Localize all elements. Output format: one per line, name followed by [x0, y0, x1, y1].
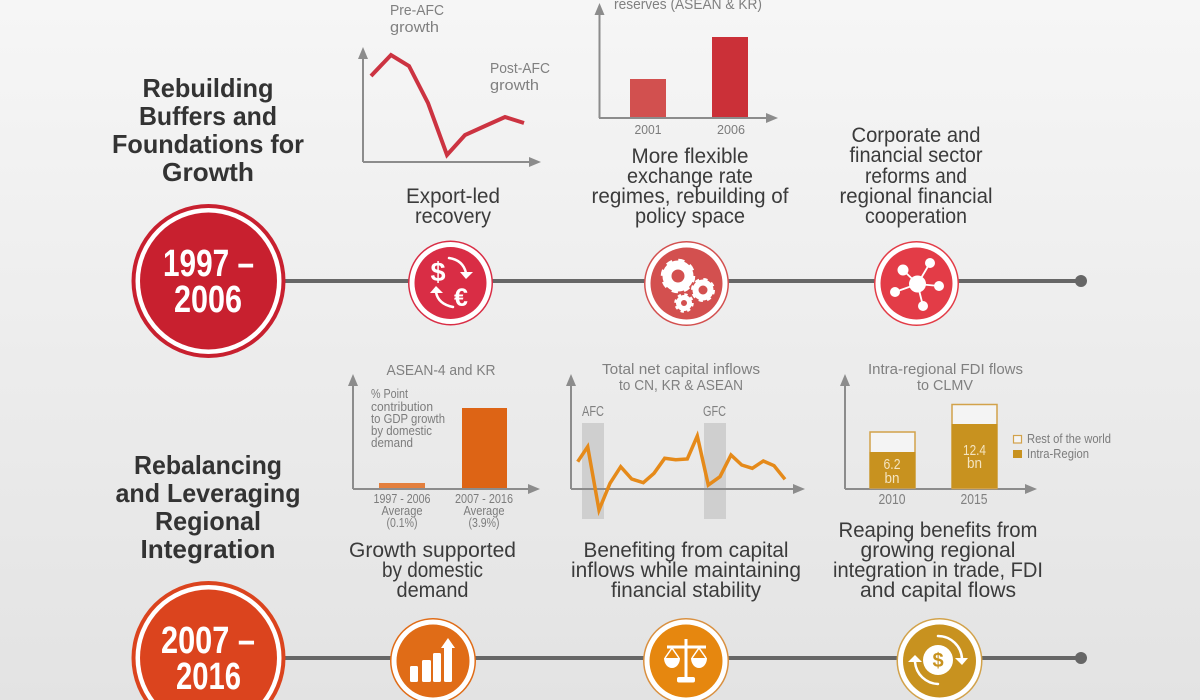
text: export-led recovery — [406, 185, 500, 228]
text: corporate and financial sector reforms: reforms and — [865, 165, 967, 188]
line chart: total net capital inflows: GFC — [703, 403, 726, 420]
heading: Rebalancing and Leveraging Regional Integration — [116, 450, 300, 564]
icon: currency exchange — [408, 240, 493, 326]
bar chart: reserves: 2001 — [634, 123, 662, 137]
icon: currency exchange: € — [454, 284, 468, 312]
heading: Rebalancing and Leveraging Regional Integration: Integration — [140, 534, 276, 564]
line chart: total net capital inflows: AFC — [582, 403, 604, 420]
text: export-led recovery: Export-led — [406, 185, 500, 208]
legend — [1013, 432, 1111, 461]
icon: dollar cycle — [896, 618, 982, 700]
line chart: total net capital inflows — [566, 361, 805, 519]
bar chart: domestic demand contribution: 2007 - 2016 — [455, 492, 513, 506]
icon: gears — [644, 241, 729, 326]
text: flexible exchange rate regimes: More flexible — [632, 145, 748, 168]
text: corporate and financial sector reforms: financial sector — [850, 144, 982, 167]
text: corporate and financial sector reforms: Corporate and — [852, 124, 980, 147]
text: corporate and financial sector reforms — [840, 124, 992, 228]
line chart: pre and post AFC growth: growth — [490, 77, 539, 94]
stacked bar chart: intra-regional FDI flows: 2010 — [878, 491, 906, 508]
stacked bar chart: intra-regional FDI flows: 6.2 — [884, 456, 900, 473]
timeline 1 — [280, 275, 1087, 287]
bar chart: domestic demand contribution: by domestic — [371, 424, 432, 438]
text: reaping benefits from regional integration: integration in trade, FDI — [833, 559, 1043, 582]
badge: 1997-2006 — [132, 204, 286, 358]
stacked bar chart: intra-regional FDI flows: 12.4 — [963, 442, 986, 459]
panel: 1997-2006 section — [112, 0, 1087, 358]
panel: 2007-2016 section — [116, 361, 1111, 700]
text: benefiting from capital inflows: financial stability — [611, 579, 761, 602]
bar chart: domestic demand contribution: 1997 - 2006 — [374, 492, 431, 506]
legend: Rest of the world — [1027, 432, 1111, 446]
text: growth supported by domestic demand: demand — [396, 579, 468, 602]
icon: balance scale — [643, 618, 729, 700]
text: growth supported by domestic demand — [349, 539, 516, 602]
text: corporate and financial sector reforms: cooperation — [865, 205, 967, 228]
heading: Rebuilding Buffers and Foundations for Growth: Rebuilding — [142, 73, 274, 103]
heading: Rebalancing and Leveraging Regional Integration: Rebalancing — [134, 450, 282, 480]
text: corporate and financial sector reforms: regional financial — [840, 185, 992, 208]
stacked bar chart: intra-regional FDI flows: to CLMV — [917, 377, 973, 394]
text: flexible exchange rate regimes: exchange rate — [627, 165, 753, 188]
badge: 1997-2006: 1997 – — [163, 243, 254, 285]
stacked bar chart: intra-regional FDI flows: bn — [967, 455, 982, 472]
line chart: pre and post AFC growth: growth — [390, 19, 439, 36]
heading: Rebuilding Buffers and Foundations for Growth — [112, 73, 304, 187]
line chart: pre and post AFC growth — [358, 2, 550, 167]
stacked bar chart: intra-regional FDI flows — [840, 361, 1111, 508]
badge: 1997-2006: 2006 — [174, 279, 242, 321]
line chart: total net capital inflows: to CN, KR & ASEAN — [619, 377, 743, 394]
text: growth supported by domestic demand: Growth supported — [349, 539, 516, 562]
heading: Rebalancing and Leveraging Regional Integration: Regional — [155, 506, 261, 536]
icon: dollar cycle: $ — [932, 650, 944, 672]
line chart: total net capital inflows: Total net capital inflows — [602, 361, 760, 378]
text: growth supported by domestic demand: by domestic — [382, 559, 483, 582]
bar chart: domestic demand contribution: % Point — [371, 387, 408, 401]
text: flexible exchange rate regimes — [592, 145, 789, 228]
text: reaping benefits from regional integration: and capital flows — [860, 579, 1016, 602]
timeline 2 — [280, 652, 1087, 664]
text: export-led recovery: recovery — [415, 205, 491, 228]
heading: Rebalancing and Leveraging Regional Integration: and Leveraging — [116, 478, 300, 508]
bar chart: domestic demand contribution: Average — [464, 504, 505, 518]
text: reaping benefits from regional integration: Reaping benefits from — [838, 519, 1038, 542]
stacked bar chart: intra-regional FDI flows: Intra-regional FDI flows — [868, 361, 1023, 378]
bar chart: domestic demand contribution: ASEAN-4 and KR — [386, 362, 496, 379]
bar chart: domestic demand contribution: (0.1%) — [386, 516, 418, 530]
badge: 2007-2016 — [132, 581, 286, 700]
legend: Intra-Region — [1027, 447, 1089, 461]
text: benefiting from capital inflows — [571, 539, 801, 602]
bar chart: domestic demand contribution — [348, 362, 540, 530]
text: reaping benefits from regional integration — [833, 519, 1043, 602]
badge: 2007-2016: 2016 — [176, 656, 241, 698]
badge: 2007-2016: 2007 – — [161, 620, 255, 662]
heading: Rebuilding Buffers and Foundations for Growth: Foundations for — [112, 129, 304, 159]
text: reaping benefits from regional integration: growing regional — [860, 539, 1016, 562]
icon: currency exchange: $ — [430, 257, 446, 287]
icon: rising bars — [390, 618, 476, 700]
text: flexible exchange rate regimes: regimes, rebuilding of — [592, 185, 789, 208]
heading: Rebuilding Buffers and Foundations for Growth: Growth — [162, 157, 254, 187]
bar chart: domestic demand contribution: demand — [371, 436, 413, 450]
text: flexible exchange rate regimes: policy space — [635, 205, 745, 228]
text: benefiting from capital inflows: inflows while maintaining — [571, 559, 801, 582]
line chart: pre and post AFC growth: Post-AFC — [490, 60, 550, 77]
bar chart: domestic demand contribution: (3.9%) — [468, 516, 500, 530]
text: benefiting from capital inflows: Benefiting from capital — [584, 539, 788, 562]
bar chart: domestic demand contribution: contribution — [371, 400, 433, 414]
icon: network — [874, 241, 959, 326]
bar chart: domestic demand contribution: Average — [382, 504, 423, 518]
stacked bar chart: intra-regional FDI flows: bn — [884, 470, 900, 487]
stacked bar chart: intra-regional FDI flows: 2015 — [960, 491, 988, 508]
bar chart: domestic demand contribution: to GDP growth — [371, 412, 445, 426]
bar chart: reserves — [594, 0, 778, 137]
heading: Rebuilding Buffers and Foundations for Growth: Buffers and — [139, 101, 277, 131]
line chart: pre and post AFC growth: Pre-AFC — [390, 2, 444, 19]
bar chart: reserves: 2006 — [717, 123, 745, 137]
